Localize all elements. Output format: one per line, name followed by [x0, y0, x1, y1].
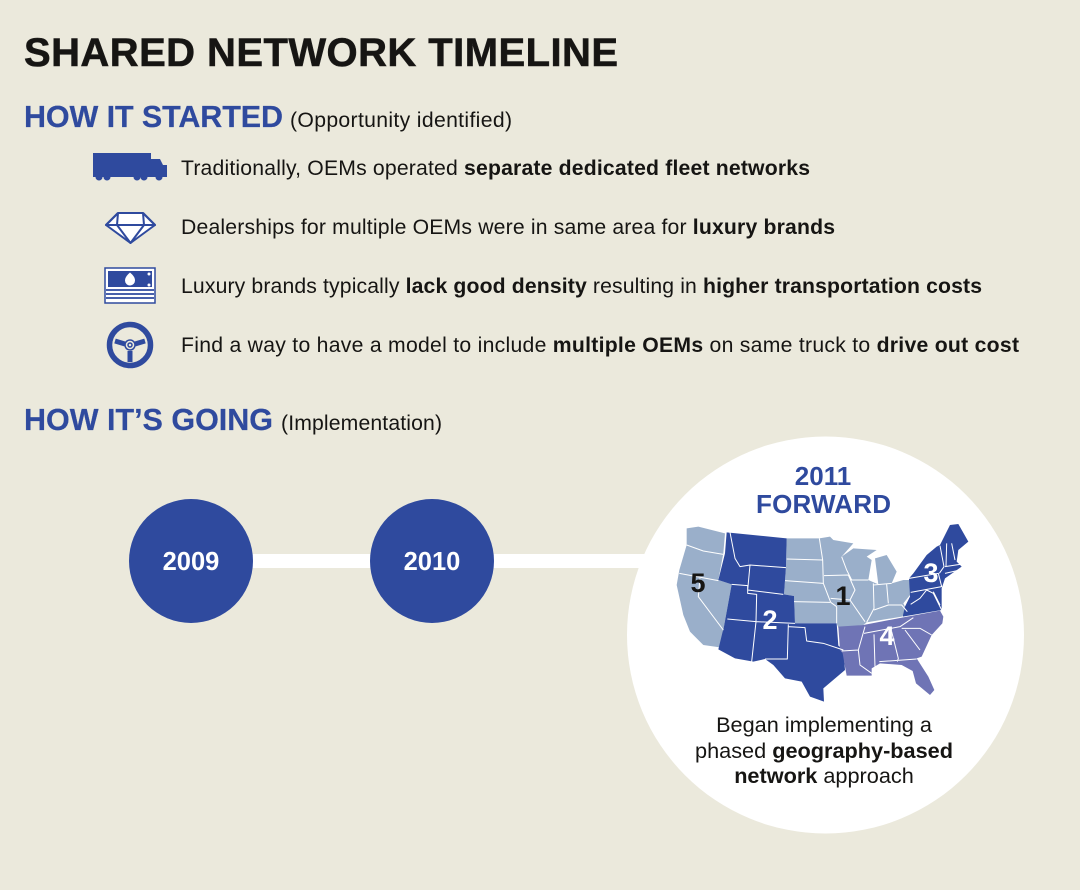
caption: network approach	[734, 763, 914, 788]
region 1 central	[784, 537, 910, 628]
title: SHARED NETWORK TIMELINE	[24, 31, 618, 75]
timeline node: 2010: 2010	[404, 548, 460, 576]
panel: 2011 forward	[627, 436, 1024, 834]
heading: 2011 forward: FORWARD	[756, 489, 891, 519]
text: dealerships: Dealerships for multiple OEMs were in same area for luxury brands	[181, 216, 835, 239]
text: separate fleet networks: Traditionally, OEMs operated separate dedicated fleet networks	[181, 157, 810, 180]
timeline node: 2009: 2009	[163, 548, 219, 576]
region 2 southwest and mountain	[718, 532, 845, 702]
region 4 southeast	[838, 611, 943, 695]
map label: 5: 5	[690, 568, 706, 598]
timeline connector	[240, 554, 650, 568]
caption	[695, 712, 953, 788]
timeline node: 2009	[129, 499, 253, 623]
map: US regions	[677, 524, 968, 702]
map label: 2: 2	[762, 605, 778, 635]
section heading: how it's going: (Implementation)	[281, 412, 442, 435]
icon: truck	[93, 153, 167, 180]
icon: steering wheel	[110, 324, 150, 366]
heading: 2011 forward: 2011	[795, 461, 851, 491]
icon: diamond	[106, 213, 155, 243]
caption: phased geography-based	[695, 738, 953, 763]
map label: 1: 1	[835, 581, 851, 611]
section heading: how it's going	[24, 403, 442, 437]
section heading: how it's going: HOW IT’S GOING	[24, 403, 273, 437]
timeline node: 2010	[370, 499, 494, 623]
section heading: how it started: (Opportunity identified)	[290, 109, 512, 132]
section heading: how it started	[24, 100, 512, 134]
region 3 northeast	[903, 524, 968, 617]
text: density: Luxury brands typically lack good density resulting in higher transportation costs	[181, 275, 982, 298]
text: multiple OEMs: Find a way to have a model to include multiple OEMs on same truck to drive out cost	[181, 334, 1019, 357]
heading: 2011 forward	[756, 461, 891, 519]
region 5 west	[677, 527, 732, 647]
map label: 3: 3	[923, 558, 939, 588]
map label: 4: 4	[879, 621, 895, 651]
caption: Began implementing a	[716, 712, 933, 737]
icon: money stack	[105, 268, 155, 303]
section heading: how it started: HOW IT STARTED	[24, 100, 283, 134]
